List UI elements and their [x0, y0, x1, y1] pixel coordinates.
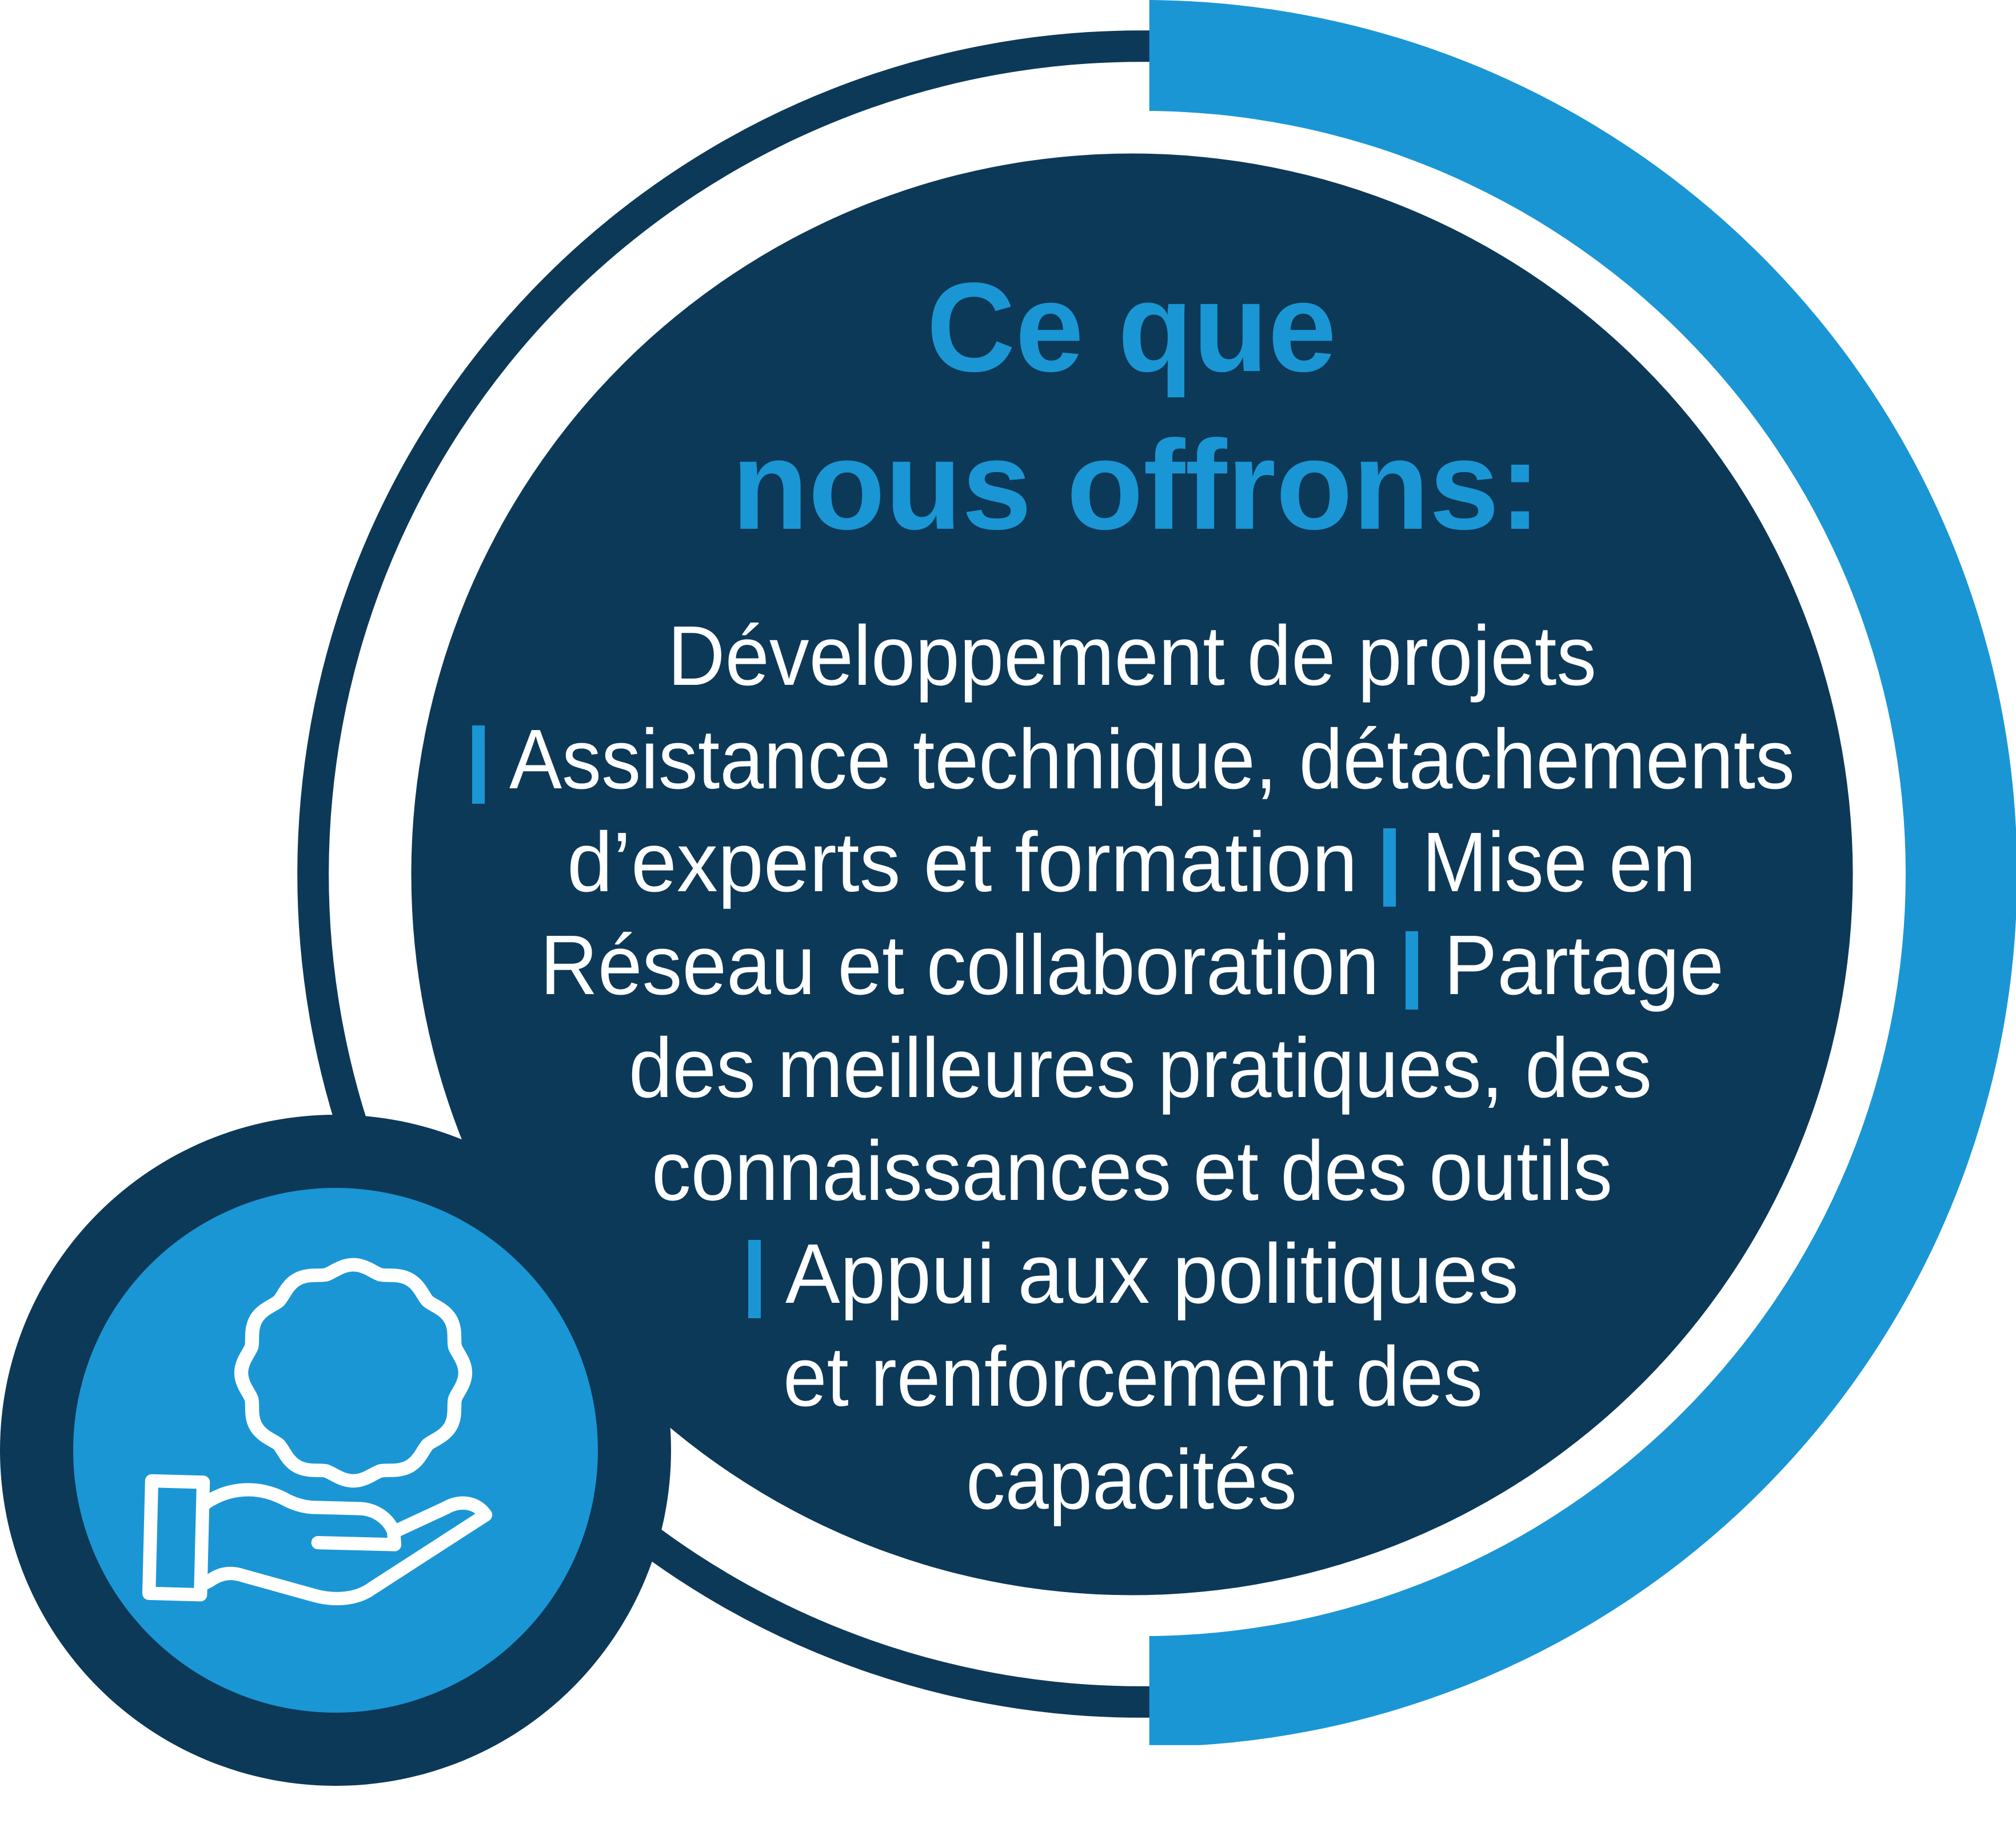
- text block: list of services: connaissances et des outils: [652, 1124, 1612, 1218]
- text block: list of services: Assistance technique, détachements: [509, 712, 1795, 807]
- text block: list of services: Réseau et collaboration: [540, 918, 1379, 1012]
- title: Ce que: [927, 257, 1336, 398]
- text block: list of services: Appui aux politiques: [785, 1227, 1519, 1321]
- text block: list of services: et renforcement des: [783, 1330, 1483, 1424]
- text block: list of services: Mise en: [1422, 815, 1696, 909]
- icon: hand holding scalloped badge: [149, 1264, 485, 1599]
- text block: list of services: [472, 609, 1795, 1527]
- title: nous offrons:: [732, 414, 1541, 556]
- text block: list of services: d’experts et formation: [567, 815, 1358, 909]
- thick blue outer arc: [1149, 0, 2016, 1745]
- main dark circle panel: [412, 153, 1853, 1595]
- icon badge circle: [0, 1115, 671, 1786]
- text block: list of services: capacités: [966, 1433, 1297, 1527]
- title: [732, 257, 1541, 556]
- icon part: hand and cuff: [149, 1481, 485, 1599]
- text block: list of services: Partage: [1444, 918, 1724, 1012]
- text block: list of services: des meilleures pratiques, des: [629, 1021, 1652, 1115]
- thin outer ring arc: [297, 30, 1149, 1718]
- icon part: scalloped badge: [241, 1264, 465, 1481]
- text block: list of services: Développement de projets: [668, 609, 1596, 703]
